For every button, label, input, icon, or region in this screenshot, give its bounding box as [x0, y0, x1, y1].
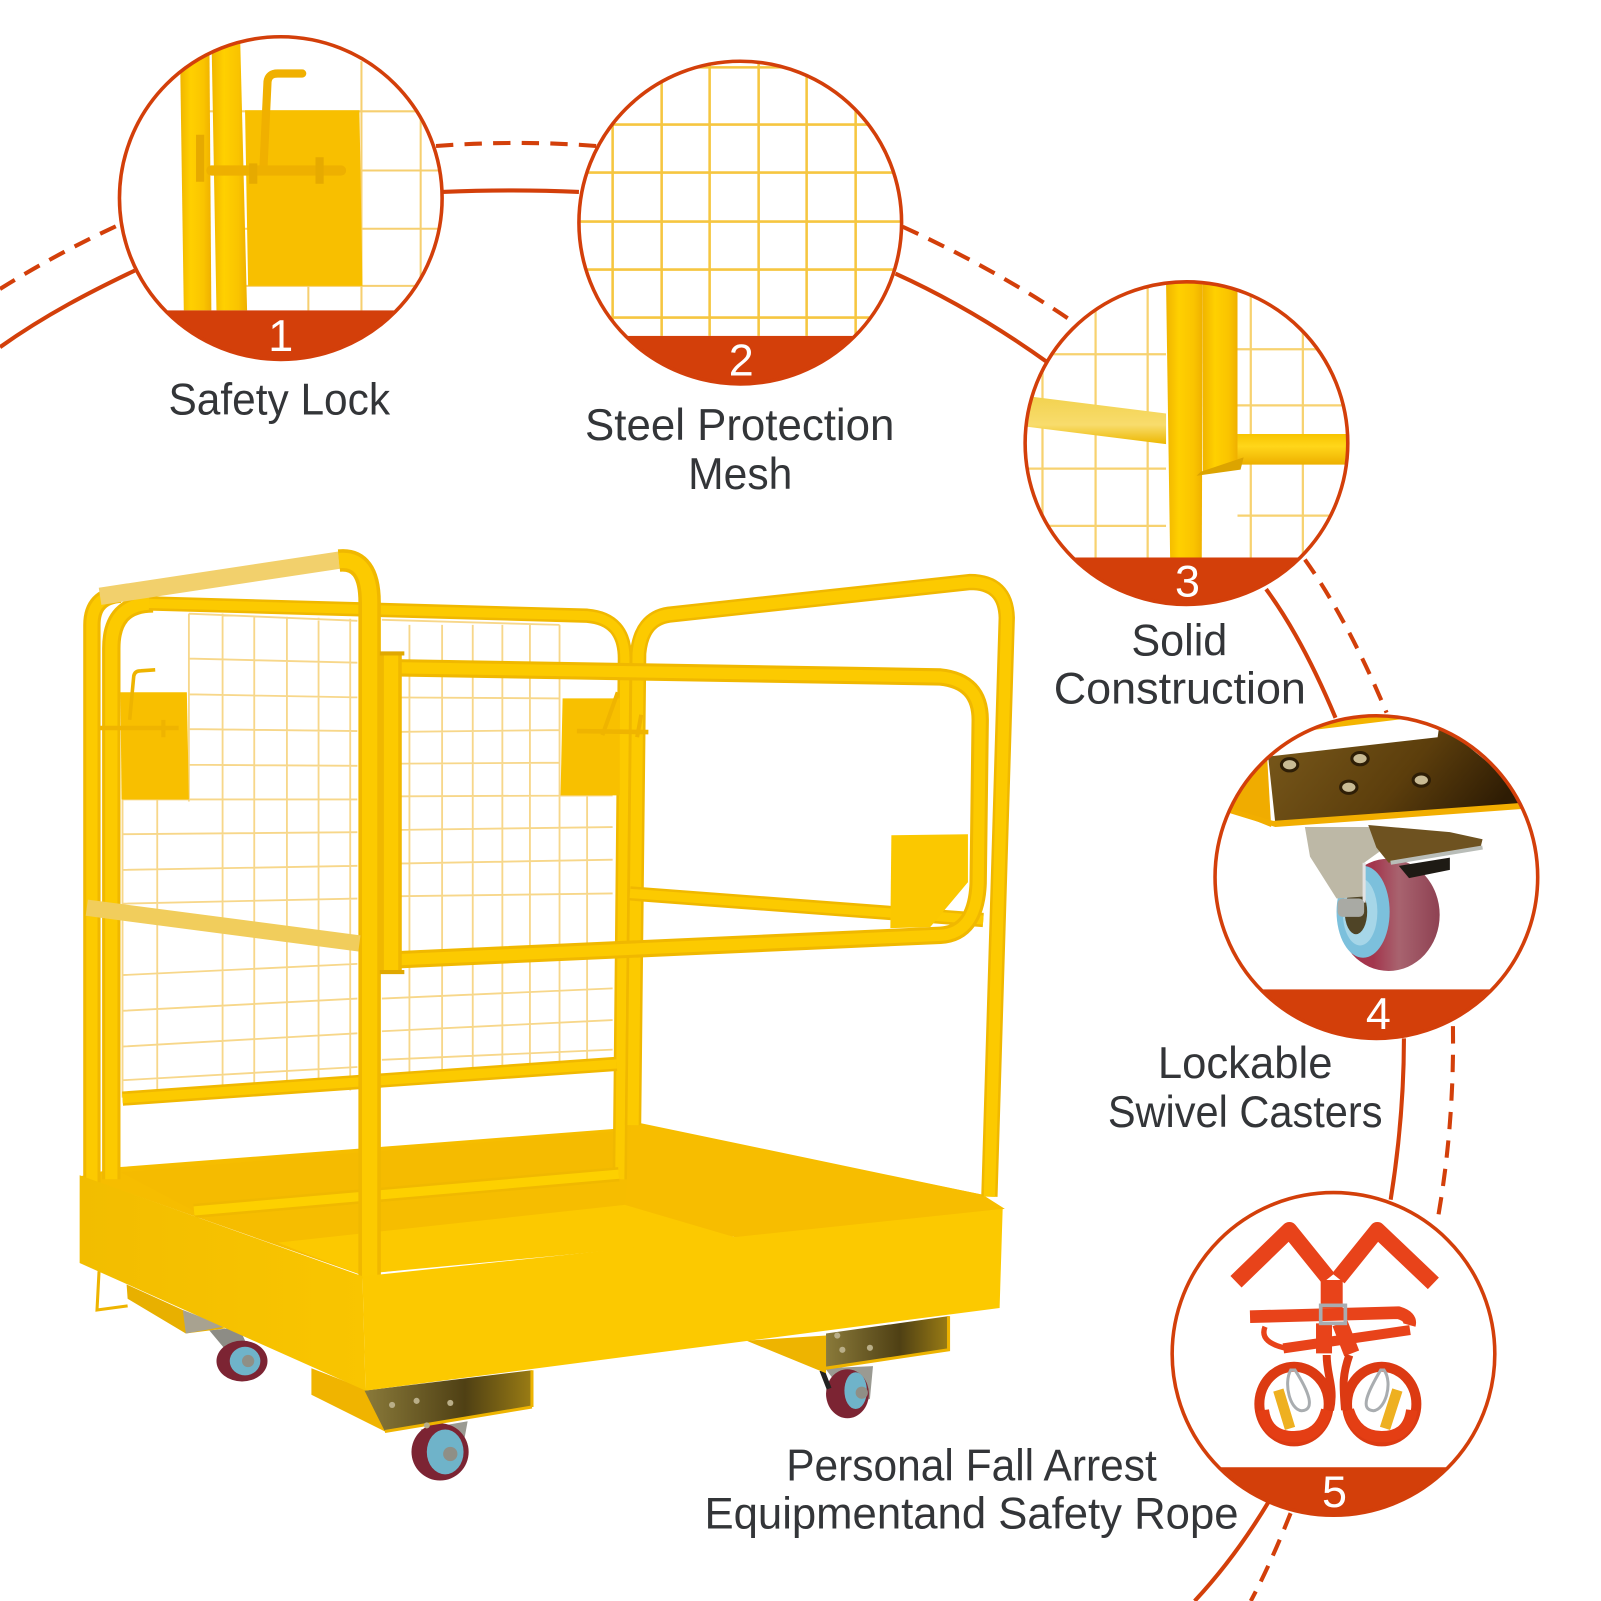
label: steel protection mesh — [585, 399, 894, 499]
label: lockable swivel casters: Lockable — [1158, 1037, 1332, 1088]
harness and ropes — [1236, 1230, 1433, 1441]
callout 2: steel mesh: 2 — [729, 335, 754, 386]
wheel — [1350, 858, 1440, 971]
brake pedal — [1368, 825, 1483, 863]
label: solid construction: Construction — [1054, 663, 1306, 714]
callout 1: safety lock — [118, 35, 444, 362]
solid connector arc — [0, 190, 1404, 1601]
fork pockets — [127, 1284, 949, 1432]
casters — [209, 1327, 873, 1481]
callout 4: lockable swivel casters: 4 — [1366, 988, 1391, 1039]
folding handle — [97, 1271, 128, 1310]
label: personal fall arrest equipment: Personal Fall Arrest — [786, 1440, 1157, 1491]
bolts — [1281, 753, 1429, 793]
callout 5: fall arrest equipment: 5 — [1322, 1466, 1347, 1517]
label: steel protection mesh: Mesh — [688, 448, 792, 499]
label: solid construction: Solid — [1131, 615, 1227, 666]
callout 3: solid construction — [1023, 280, 1350, 606]
callout 1: safety lock: 1 — [268, 310, 293, 361]
label: safety lock: Safety Lock — [168, 374, 391, 425]
callout 2: steel mesh — [577, 60, 904, 386]
gate and front tubes — [87, 560, 980, 1278]
main product: yellow work platform cage — [80, 560, 1007, 1481]
pocket interior — [1268, 730, 1518, 821]
callout 3: solid construction: 3 — [1175, 555, 1200, 606]
label: personal fall arrest equipment — [705, 1440, 1239, 1539]
platform interior — [81, 1121, 1005, 1274]
label: lockable swivel casters — [1108, 1037, 1382, 1137]
platform outer faces — [80, 1175, 1003, 1391]
label: solid construction — [1054, 615, 1306, 714]
label: lockable swivel casters: Swivel Casters — [1108, 1086, 1382, 1137]
wire mesh panels — [123, 614, 613, 1098]
label: personal fall arrest equipment: Equipmentand Safety Rope — [705, 1488, 1239, 1539]
back and right frame tubes — [111, 582, 1007, 1211]
callout 5: fall arrest equipment — [1164, 1193, 1511, 1529]
callout 4: lockable swivel casters — [1215, 710, 1542, 1051]
latch plates — [93, 670, 968, 928]
top flange — [1314, 718, 1400, 730]
label: steel protection mesh: Steel Protection — [585, 399, 894, 450]
bracket — [1305, 827, 1387, 899]
